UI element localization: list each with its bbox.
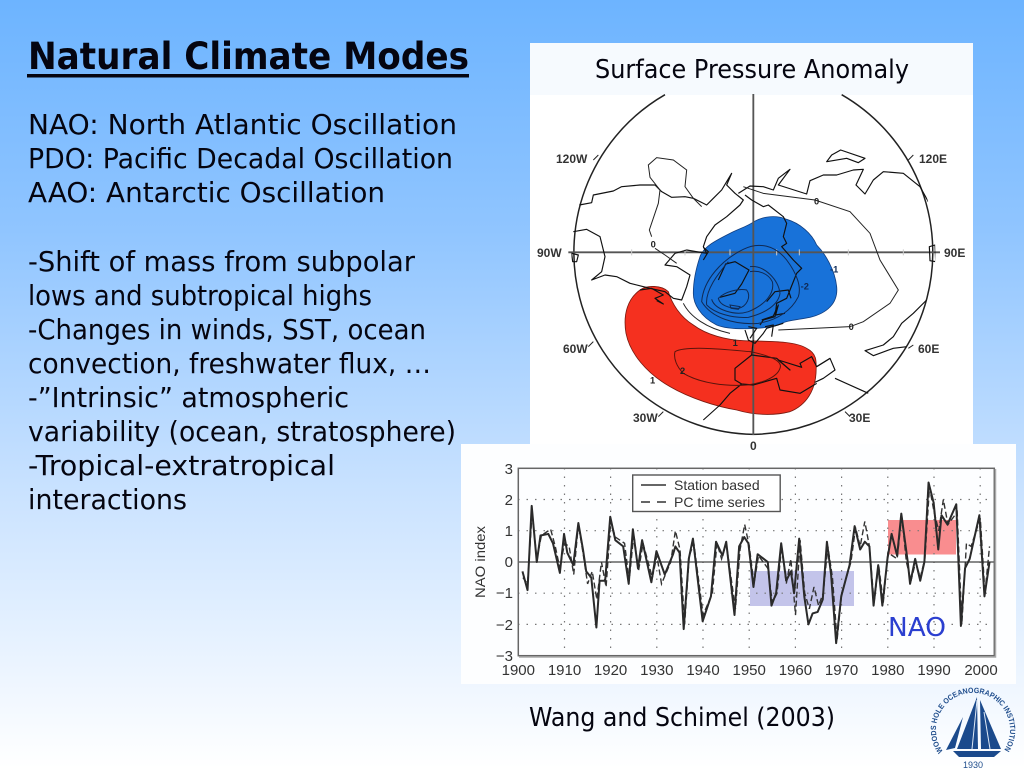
- longitude labels: [537, 152, 965, 425]
- polar map: [568, 94, 940, 435]
- x axis labels: 1990: [917, 662, 951, 679]
- text block: mode characteristics: lows and subtropical highs: [28, 279, 372, 312]
- title: Natural Climate Modes: [28, 35, 469, 78]
- text block: mode characteristics: convection, freshwater flux, …: [28, 347, 431, 380]
- y axis labels: −3: [496, 648, 513, 665]
- chart legend: Station based: [674, 477, 760, 493]
- contour labels: 0: [651, 239, 656, 249]
- citation: Wang and Schimel (2003): [529, 703, 835, 733]
- map bottom longitude label: 0: [750, 439, 757, 453]
- y axis labels: 2: [505, 492, 513, 509]
- longitude labels: 60W: [563, 342, 588, 356]
- longitude labels: 120W: [556, 152, 588, 166]
- panel: NAO index time series chart: [461, 444, 1016, 684]
- grid lines: [518, 468, 994, 656]
- x axis labels: 2000: [964, 662, 998, 679]
- contour labels: [650, 197, 854, 385]
- longitude labels: 90E: [944, 246, 965, 260]
- x axis labels: 1980: [871, 662, 904, 679]
- map frame and graticule: [574, 95, 933, 434]
- longitude labels: 120E: [919, 152, 947, 166]
- text block: mode characteristics: [28, 245, 456, 516]
- map heading: [530, 43, 973, 95]
- contour labels: 1: [650, 375, 655, 385]
- contour labels: -1: [830, 265, 838, 275]
- contour labels: 0: [814, 197, 819, 207]
- longitude labels: 60E: [918, 342, 939, 356]
- logo: Woods Hole Oceanographic Institution: [930, 688, 1016, 768]
- PC time series dashed line: [523, 487, 990, 640]
- map heading: Surface Pressure Anomaly: [595, 55, 909, 85]
- text block: mode definitions: [28, 108, 457, 209]
- coastlines: [572, 150, 936, 420]
- y axis title: NAO index: [472, 526, 488, 598]
- contour labels: 0: [849, 322, 854, 332]
- x axis labels: 1930: [640, 662, 673, 679]
- logo ship sails: [946, 697, 1001, 757]
- shaded period: positive phase: [888, 520, 956, 554]
- contour labels: 1: [733, 338, 738, 348]
- y axis labels: 0: [505, 554, 513, 571]
- contour labels: -2: [801, 281, 809, 291]
- x axis labels: 1900: [502, 662, 535, 679]
- y axis labels: [496, 461, 513, 665]
- chart legend: PC time series: [674, 494, 765, 510]
- contour labels: 2: [680, 366, 685, 376]
- text block: mode characteristics: variability (ocean, stratosphere): [28, 415, 456, 448]
- x axis labels: [502, 662, 998, 679]
- negative anomaly region: [693, 217, 837, 329]
- x axis labels: 1960: [779, 662, 812, 679]
- longitude labels: 30E: [849, 411, 870, 425]
- text block: mode characteristics: -Shift of mass from subpolar: [28, 245, 415, 278]
- longitude labels: 30W: [633, 411, 658, 425]
- text block: mode characteristics: -Changes in winds, SST, ocean: [28, 313, 426, 346]
- chart legend: [633, 475, 780, 512]
- y axis labels: 1: [505, 523, 513, 540]
- station based solid line: [522, 482, 990, 643]
- logo circular name: WOODS HOLE OCEANOGRAPHIC INSTITUTION: [930, 688, 1016, 754]
- zero line: [518, 561, 994, 563]
- x axis labels: 1950: [733, 662, 766, 679]
- y axis labels: −2: [496, 617, 513, 634]
- longitude labels: 90W: [537, 246, 562, 260]
- text block: mode characteristics: interactions: [28, 483, 187, 516]
- y axis labels: 3: [505, 461, 513, 478]
- panel: surface pressure anomaly map: [530, 43, 973, 445]
- text block: mode characteristics: -”Intrinsic” atmospheric: [28, 381, 349, 414]
- x axis labels: 1920: [594, 662, 627, 679]
- plot frame: [518, 468, 996, 657]
- NAO label: NAO: [888, 613, 946, 643]
- text block: mode definitions: AAO: Antarctic Oscillation: [28, 176, 385, 209]
- text block: mode definitions: NAO: North Atlantic Oscillation: [28, 108, 457, 141]
- x axis labels: 1940: [686, 662, 720, 679]
- x axis labels: 1910: [548, 662, 581, 679]
- shaded period: negative phase: [750, 571, 854, 606]
- text block: mode characteristics: -Tropical-extratropical: [28, 449, 335, 482]
- text block: mode definitions: PDO: Pacific Decadal Oscillation: [28, 142, 453, 175]
- positive anomaly region: [625, 286, 816, 414]
- y axis labels: −1: [496, 585, 513, 602]
- x axis labels: 1970: [825, 662, 858, 679]
- pressure contours: [648, 158, 898, 333]
